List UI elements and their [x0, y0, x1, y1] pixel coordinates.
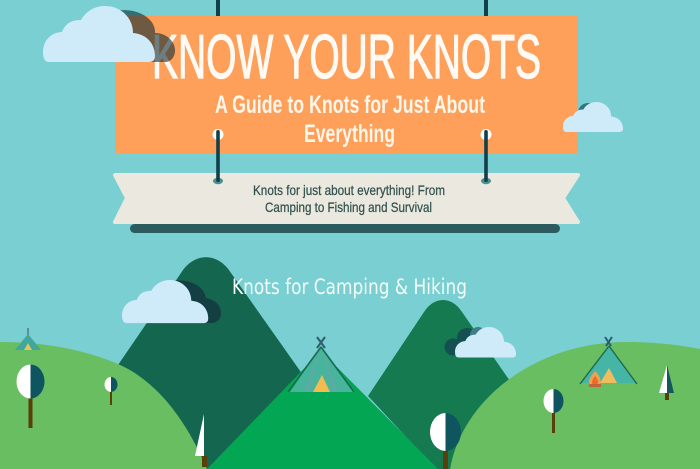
- banner text: [253, 182, 445, 215]
- ribbon banner: [115, 175, 578, 222]
- subtitle: Everything: [304, 120, 395, 148]
- subtitle: [215, 91, 485, 148]
- round tree: right hill: [544, 389, 564, 433]
- right hanging rope with eyelet: [480, 129, 492, 184]
- cloud: top right: [563, 102, 623, 132]
- mountain: right: [368, 300, 512, 469]
- cloud: mountain right: [455, 327, 516, 358]
- section heading: Knots for Camping & Hiking: [232, 275, 467, 299]
- pine tree: far right: [659, 365, 674, 400]
- left hanging rope with eyelet: [212, 129, 224, 184]
- cloud: mountain left: [122, 280, 208, 323]
- top hanging ropes: [216, 0, 488, 17]
- round tree: small left: [104, 377, 118, 405]
- banner text: Knots for just about everything! From: [253, 182, 445, 198]
- mountain: centre bright: [207, 351, 438, 469]
- cloud shadow: top left: [118, 10, 175, 62]
- round tree: far left: [16, 364, 44, 428]
- hill: right: [450, 342, 700, 469]
- tent: centre: [288, 337, 354, 392]
- campfire: [589, 371, 601, 387]
- tent: small left: [15, 328, 41, 350]
- round tree: centre right: [430, 413, 461, 469]
- banner shadow bar: [130, 224, 560, 233]
- cloud: top left: [43, 6, 155, 62]
- mountain: left dark: [118, 257, 310, 469]
- hill: left: [0, 342, 207, 469]
- banner text: Camping to Fishing and Survival: [265, 199, 432, 215]
- pine tree: centre left: [195, 414, 215, 467]
- cloud shadow: mountain right: [444, 327, 486, 356]
- subtitle: A Guide to Knots for Just About: [215, 91, 485, 119]
- cloud shadow: top right: [578, 103, 598, 123]
- tent: right with campfire: [580, 337, 637, 387]
- title sign panel: [115, 16, 578, 153]
- cloud shadow: mountain left: [170, 280, 221, 323]
